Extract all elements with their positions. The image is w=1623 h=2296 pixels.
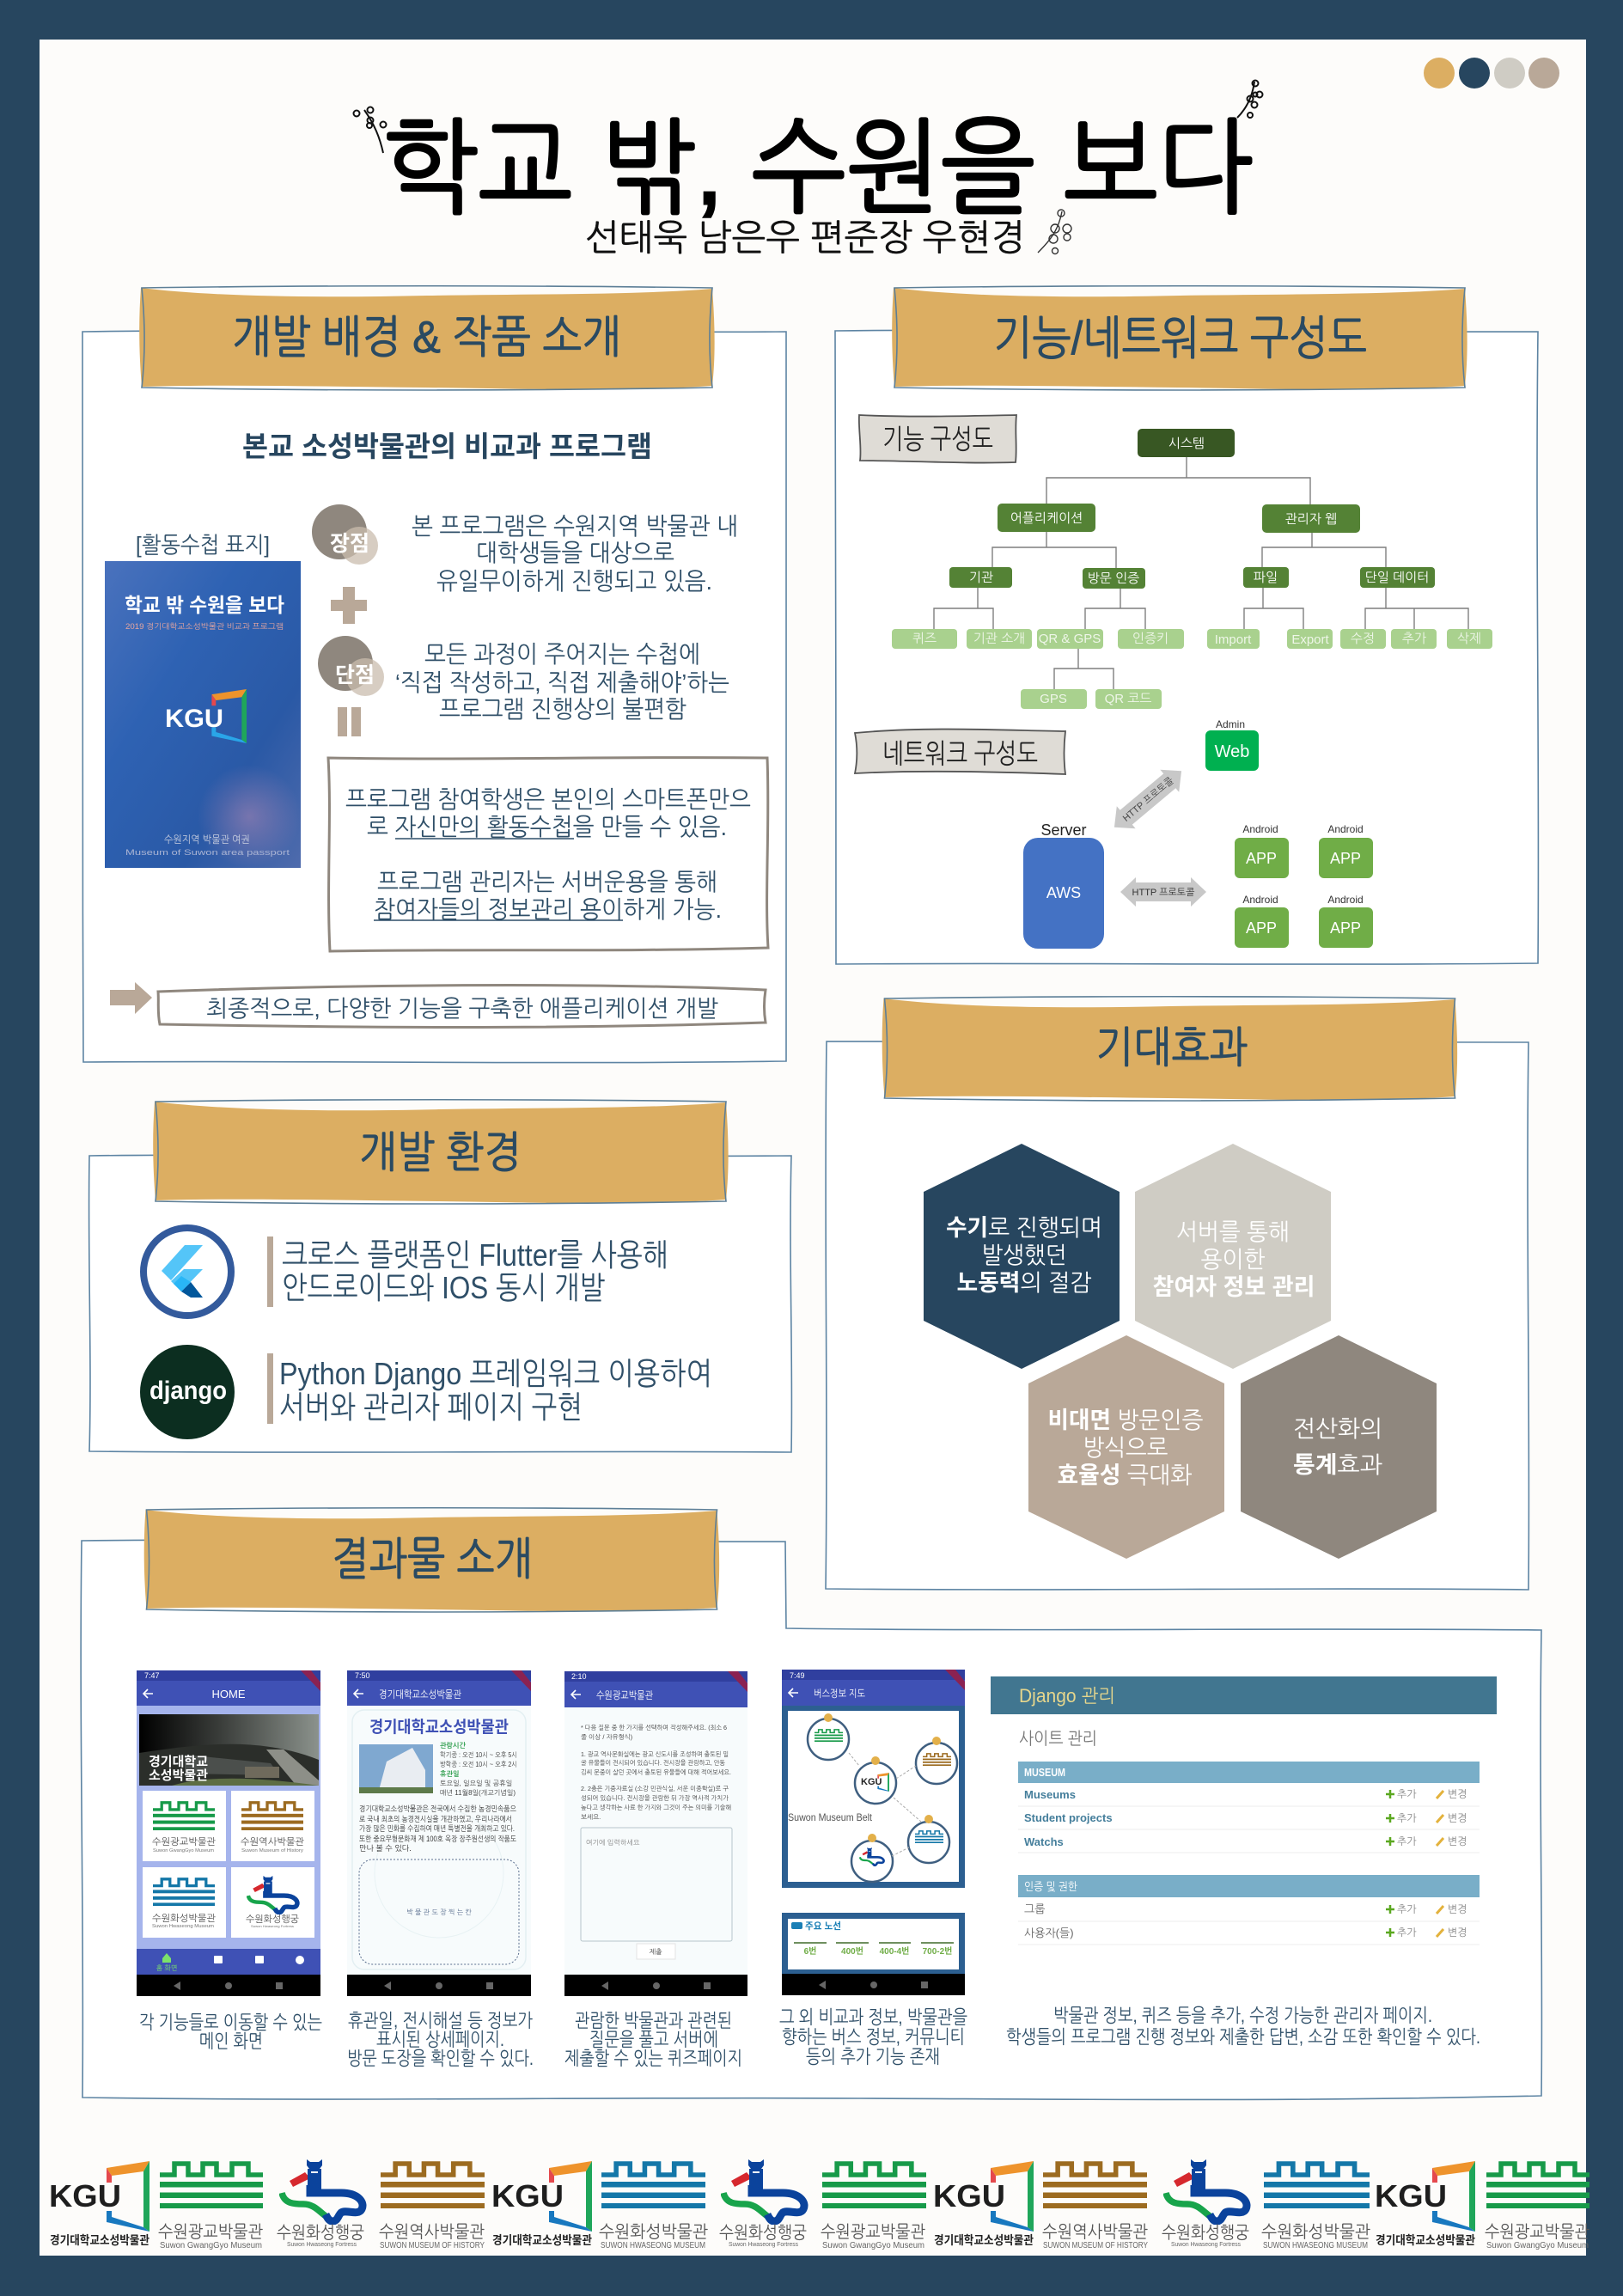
accent bar [267,1353,273,1424]
logo: KGU 2 [491,2161,592,2247]
palette dots [1424,58,1559,89]
panel: 개발 환경 [89,1100,791,1452]
logo: Hwaseong museum 2: SUWON HWASEONG MUSEUM [1263,2241,1368,2250]
banner [139,286,715,390]
screenshot: django admin: 변경 [1448,1903,1467,1915]
screenshot: detail page: 매년 11월8일(개교기념일) [440,1789,516,1797]
screenshot: django admin: Django 관리 [1019,1685,1115,1707]
screenshot: bus routes: 6번 [804,1946,816,1957]
logo: Hwaseong fortress 2: Suwon Hwaseong Fortress [729,2242,798,2248]
tag: 기능 구성도 [859,415,1016,463]
logo: Hwaseong fortress 1: 수원화성행궁 [277,2224,364,2243]
screenshot: bus map: Suwon Museum Belt [788,1811,873,1823]
screenshot: django admin: 추가 [1397,1835,1417,1847]
subtitle: team names: 선태욱 남은우 편준장 우현경 [585,217,1025,258]
network: android apps: APP [1246,919,1277,937]
hexagon: statistics: 통계효과 [1293,1452,1382,1478]
screenshot: django admin: 그룹 [1024,1902,1045,1915]
screenshot: quiz page: 보세요. [581,1813,601,1821]
screenshot: django admin: 변경 [1448,1788,1467,1800]
screenshot: bus routes: 400-4번 [880,1946,909,1957]
callout: solution box: 프로그램 참여학생은 본인의 스마트폰만으 [345,786,751,813]
screenshot: quiz page: 높다고 생각하는 사료 한 가지와 그것이 주는 의미를 기술해 [581,1804,731,1811]
icon: left blossom branch [354,107,387,153]
caption: detail page: 표시된 상세페이지. [376,2029,504,2050]
screenshot: bus map: KGU [861,1777,882,1787]
caption: quiz page: 제출할 수 있는 퀴즈페이지 [564,2048,742,2069]
banner [153,1100,729,1204]
heading: 개발 환경 [359,1128,522,1176]
logo: Hwaseong fortress 2 [719,2159,807,2248]
hexagon: labor saving: 노동력의 절감 [957,1270,1091,1296]
logo: GwangGyo 3 [1485,2164,1589,2250]
panel outline [826,1041,1528,1590]
screenshot: django admin: Student projects [1024,1811,1113,1824]
screenshot: detail page: 7:50 [355,1671,370,1680]
caption: extras: 등의 추가 기능 존재 [806,2046,940,2067]
screenshot: detail page: 박 물 관 도 장 찍 는 칸 [406,1908,472,1916]
screenshot: quiz page [564,1671,747,1996]
screenshot: bus routes [782,1913,965,1995]
screenshot: home screen: 수원화성행궁 [246,1914,300,1925]
icon: django logo: django [149,1377,227,1405]
network: android apps: APP [1330,919,1361,937]
panel outline [82,331,787,1063]
screenshot: home screen: 수원역사박물관 [241,1836,305,1847]
screenshot: quiz page: 2:10 [571,1672,587,1681]
screenshot: detail page [347,1670,531,1996]
network: admin web [1205,718,1259,771]
logo: KGU 4: 경기대학교소성박물관 [1376,2233,1475,2247]
arrow [110,982,152,1014]
banner [882,997,1457,1101]
screenshot: bus routes: 700-2번 [923,1946,952,1957]
caption: django admin: 박물관 정보, 퀴즈 등을 추가, 수정 가능한 관리자 페이지. [1053,2005,1432,2026]
screenshot: home screen: Suwon Hwaseong Museum [152,1924,214,1929]
caption: detail page: 휴관일, 전시해설 등 정보가 [348,2010,533,2031]
network: android apps [1235,823,1373,948]
screenshot: django admin: 변경 [1448,1835,1467,1847]
flutter text: 안드로이드와 IOS 동시 개발 [282,1270,605,1305]
function tree nodes: 기관 소개 [973,632,1025,646]
hexagon: labor saving: 수기로 진행되며 [946,1215,1102,1241]
caption: django admin: 학생들의 프로그램 진행 정보와 제출한 답변, 소감 또한 확인할 수 있다. [1006,2026,1480,2048]
screenshot: home screen: 소성박물관 [149,1768,208,1783]
function tree nodes [892,429,1492,709]
badge: 단점 [318,636,384,696]
screenshot: quiz page: 여기에 입력하세요 [586,1839,640,1847]
passport cover image: KGU [165,705,223,733]
banner [144,1508,719,1612]
passport cover image: 학교 밖 수원을 보다 [125,594,284,616]
network: android apps: Android [1242,894,1278,906]
logo: history museum 1 [379,2164,485,2250]
logo: GwangGyo 1: Suwon GwangGyo Museum [160,2241,262,2250]
hexagon: contactless efficiency: 효율성 극대화 [1057,1462,1193,1488]
logo: KGU 2: KGU [491,2178,564,2214]
icon: flutter logo [143,1228,231,1316]
logo: KGU 2: 경기대학교소성박물관 [492,2233,592,2247]
function tree nodes: GPS [1040,692,1067,706]
screenshot: detail page: 경기대학교소성박물관 [369,1718,509,1737]
logo: GwangGyo 2: 수원광교박물관 [821,2223,925,2242]
screenshot: quiz page: 2. 2층은 기증자료실 (소강 민관식실, 서운 이종학실)로 구 [581,1785,729,1792]
screenshot: detail page: 토요일, 일요일 및 공휴일 [440,1780,512,1787]
screenshot: home screen: 수원화성박물관 [152,1913,217,1924]
screenshot: home screen: 홈 화면 [156,1964,177,1972]
callout: solution box: 로 자신만의 활동수첩을 만들 수 있음. [367,814,727,840]
screenshot: detail page: 학기중 : 오전 10시 ~ 오후 5시 [440,1751,517,1759]
hexagon: participant management: 용이한 [1201,1247,1265,1273]
screenshot: bus routes: 400번 [841,1946,863,1957]
django text [279,1356,712,1425]
screenshot: home screen: Suwon Museum of History [241,1848,304,1853]
caption: extras: 그 외 비교과 정보, 박물관을 [779,2006,967,2028]
network: AWS server: Server [1040,821,1087,839]
advantage text: 본 프로그램은 수원지역 박물관 내 [412,513,738,540]
function tree nodes: QR & GPS [1039,632,1101,646]
screenshot: quiz page: 수원광교박물관 [596,1689,653,1701]
panel: 결과물 소개 [81,1508,1541,2100]
caption: extras: 향하는 버스 정보, 커뮤니티 [782,2026,965,2048]
arrow: server to apps [1120,877,1206,907]
callout: solution box: 참여자들의 정보관리 용이하게 가능. [374,896,722,923]
logo: Hwaseong museum 1: SUWON HWASEONG MUSEUM [601,2241,705,2250]
logo: history museum 2: SUWON MUSEUM OF HISTORY [1043,2241,1148,2250]
hexagon: contactless efficiency: 비대면 방문인증 [1048,1408,1203,1433]
function tree nodes: 추가 [1402,632,1426,646]
screenshot: quiz page: 굴 유물들이 전시되어 있습니다. 전시장을 관람하고, 안동 [581,1759,725,1767]
network: android apps: APP [1246,850,1277,867]
screenshot: bus map: 7:49 [790,1671,805,1680]
title: 학교 밖, 수원을 보다 [383,111,1253,226]
screenshot: django admin: 추가 [1397,1812,1417,1824]
screenshot: bus map [782,1670,965,1888]
conclusion box [158,985,766,1028]
screenshot: django admin: 사용자(들) [1024,1927,1074,1939]
logo: history museum 2: 수원역사박물관 [1042,2223,1148,2242]
logo: GwangGyo 3: 수원광교박물관 [1485,2223,1589,2242]
network: android apps: Android [1327,894,1364,906]
logo: Hwaseong museum 1: 수원화성박물관 [599,2223,708,2242]
caption: quiz page: 관람한 박물관과 관련된 [575,2010,732,2031]
screenshot: quiz page: * 다음 질문 중 한 가지를 선택하여 작성해주세요. (최소 6 [581,1724,727,1731]
advantage text [412,513,738,595]
icon: django logo [140,1345,235,1439]
network: android apps: APP [1330,850,1361,867]
logo: KGU 4: KGU [1375,2178,1447,2214]
screenshot: django admin: 추가 [1397,1788,1417,1800]
logo: history museum 1: 수원역사박물관 [379,2223,485,2242]
screenshot: django admin: 변경 [1448,1812,1467,1824]
logo: Hwaseong fortress 3: Suwon Hwaseong Fortress [1171,2242,1241,2248]
badge: 장점 [312,504,378,565]
logo: KGU 1: 경기대학교소성박물관 [50,2233,149,2247]
logo: KGU 3: KGU [933,2178,1005,2214]
logo: GwangGyo 2 [821,2164,926,2250]
caption: quiz page [564,2010,742,2069]
icon: small blossom branch [1038,210,1071,254]
logo: Hwaseong fortress 3 [1162,2159,1249,2248]
panel outline [89,1155,791,1452]
panel outline [835,330,1538,964]
screenshot: home screen [137,1670,320,1996]
accent bar [267,1237,273,1307]
hexagon: statistics [1241,1335,1437,1559]
hexagon: participant management [1135,1144,1331,1369]
screenshot: detail page: 가장 많은 민화를 수집하여 매년 특별전을 개최하고 있다. [359,1824,515,1833]
function tree nodes: 삭제 [1457,632,1481,646]
function tree nodes: 파일 [1254,571,1278,585]
function tree nodes: 관리자 웹 [1285,512,1337,527]
screenshot: home screen: 경기대학교 [149,1755,208,1769]
screenshot: quiz page: 제출 [649,1948,662,1956]
cover caption: [활동수첩 표지] [136,532,270,558]
function tree nodes: Export [1291,632,1330,647]
function tree nodes: 어플리케이션 [1010,511,1083,526]
network: admin web: Admin [1216,718,1245,730]
screenshot: detail page: 휴관일 [440,1770,460,1778]
screenshot: bus routes: 주요 노선 [805,1920,841,1932]
flutter text: 크로스 플랫폼인 Flutter를 사용해 [282,1237,668,1273]
logo: Hwaseong fortress 1 [277,2159,364,2248]
heading: 기능/네트워크 구성도 [993,313,1367,364]
caption: detail page: 방문 도장을 확인할 수 있다. [347,2048,534,2069]
logo: Hwaseong museum 2 [1261,2164,1370,2250]
django text: 서버와 관리자 페이지 구현 [279,1389,583,1425]
screenshot: quiz page: 1. 광교 역사문화실에는 광교 신도시를 조성하며 출토된 밀 [581,1750,729,1758]
logo: Hwaseong fortress 1: Suwon Hwaseong Fortress [287,2242,357,2248]
badge: 단점: 단점 [335,663,375,687]
footer logo strip [49,2159,1589,2250]
panel: 기대효과 [826,997,1528,1590]
network: android apps: Android [1327,823,1364,835]
flutter text [282,1237,668,1305]
network: AWS server: AWS [1046,884,1081,901]
logo: Hwaseong fortress 2: 수원화성행궁 [719,2224,807,2243]
caption: detail page [347,2010,534,2069]
screenshot: django admin: 추가 [1397,1903,1417,1915]
function tree connectors [934,457,1468,689]
passport cover image: 수원지역 박물관 여권 [164,834,250,846]
django text: Python Django 프레임워크 이용하여 [279,1356,712,1391]
screenshot: home screen: Suwon Hwaseong Fortress [251,1924,294,1928]
network: android apps: Android [1242,823,1278,835]
arrow: server to apps: HTTP 프로토콜 [1132,887,1195,898]
logo: GwangGyo 2: Suwon GwangGyo Museum [822,2241,924,2250]
caption: home screen: 각 기능들로 이동할 수 있는 [139,2012,322,2033]
disadvantage text: 프로그램 진행상의 불편함 [439,696,686,723]
hexagon: contactless efficiency: 방식으로 [1083,1435,1168,1461]
caption: extras [779,2006,967,2067]
hexagon: contactless efficiency [1028,1335,1224,1559]
logo: KGU 3 [933,2161,1034,2247]
disadvantage text: 모든 과정이 주어지는 수첩에 [424,641,700,668]
tag: 네트워크 구성도: 네트워크 구성도 [882,738,1038,769]
screenshot: home screen: 7:47 [144,1671,160,1680]
caption: home screen [139,2012,322,2052]
badge: 장점: 장점 [330,532,369,556]
arrow: server to web: HTTP 프로토콜 [1120,775,1176,824]
disadvantage text [395,641,729,723]
caption: django admin [1006,2005,1480,2048]
panel: 기능/네트워크 구성도 [835,286,1538,964]
function tree nodes: 퀴즈 [912,632,937,646]
tag: 기능 구성도: 기능 구성도 [882,424,993,455]
heading: 기대효과 [1095,1023,1248,1072]
screenshot: home screen: 수원광교박물관 [152,1836,217,1847]
disadvantage text: ‘직접 작성하고, 직접 제출해야’하는 [395,669,729,696]
network: AWS server [1023,821,1104,949]
function tree nodes: 시스템 [1168,437,1205,451]
logo: GwangGyo 1: 수원광교박물관 [158,2223,263,2242]
screenshot: detail page: 관람시간 [440,1742,467,1749]
logo: KGU 3: 경기대학교소성박물관 [934,2233,1034,2247]
heading: 개발 배경 & 작품 소개 [232,313,621,363]
hexagon: participant management: 서버를 통해 [1176,1219,1290,1245]
arrow: server to web [1105,760,1191,839]
screenshot: quiz page: 줄 이상 / 자유형식) [581,1733,633,1741]
conclusion box: 최종적으로, 다양한 기능을 구축한 애플리케이션 개발 [206,996,718,1022]
panel: 개발 배경 & 작품 소개 [82,286,787,1063]
icon: equals bars [338,707,361,736]
screenshot: django admin: Watchs [1024,1835,1064,1848]
callout: solution box: 프로그램 관리자는 서버운용을 통해 [377,869,717,895]
function tree nodes: 수정 [1351,632,1375,646]
screenshot: bus map: 버스정보 지도 [814,1688,865,1700]
hexagon: participant management: 참여자 정보 관리 [1153,1274,1315,1300]
panel outline [81,1540,1541,2100]
advantage text: 대학생들을 대상으로 [476,540,674,566]
screenshot: django admin: 변경 [1448,1927,1467,1939]
caption: quiz page: 질문을 풀고 서버에 [589,2029,718,2050]
hexagon: labor saving [924,1144,1120,1369]
hexagon: statistics: 전산화의 [1293,1416,1382,1442]
logo: history museum 2 [1042,2164,1148,2250]
function tree nodes: Import [1215,632,1252,647]
screenshot: home screen: Suwon GwangGyo Museum [153,1848,214,1853]
passport cover image: Museum of Suwon area passport [125,848,290,857]
icon: right blossom branch [1237,81,1263,118]
logo: Hwaseong museum 1 [599,2164,708,2250]
screenshot: detail page: 만나 볼 수 있다. [359,1844,412,1853]
function tree nodes: 방문 인증 [1088,571,1139,586]
logo: Hwaseong museum 2: 수원화성박물관 [1261,2223,1370,2242]
screenshot: django admin: 추가 [1397,1927,1417,1939]
advantage text: 유일무이하게 진행되고 있음. [436,568,712,595]
banner [892,286,1467,390]
screenshot: django admin: Museums [1024,1788,1076,1801]
screenshot: detail page: 경기대학교소성박물관은 전국에서 수집한 농경민속품으 [359,1804,516,1813]
logo: KGU 1 [49,2161,149,2247]
logo: history museum 1: SUWON MUSEUM OF HISTORY [380,2241,485,2250]
function tree nodes: 인증키 [1132,632,1168,646]
icon: plus [331,587,367,624]
network: admin web: Web [1215,742,1249,761]
hexagon: labor saving: 발생했던 [981,1243,1067,1268]
callout: solution box [328,758,768,951]
screenshot: detail page: 또한 중요무형문화재 제 100호 옥장 장주원선생의 작품도 [359,1835,516,1843]
caption: home screen: 메인 화면 [199,2030,263,2052]
function tree nodes: 단일 데이터 [1365,571,1429,585]
screenshot: django admin: MUSEUM [1024,1766,1065,1779]
screenshot: quiz page: 성되어 있습니다. 전시장을 관람한 뒤 가장 역사적 가치가 [581,1794,729,1802]
logo: Hwaseong fortress 3: 수원화성행궁 [1162,2224,1249,2243]
screenshot: quiz page: 김씨 문중이 살던 곳에서 출토된 유물들에 대해 적어보세요. [581,1768,731,1776]
screenshot: django admin [991,1676,1497,1945]
tag: 네트워크 구성도 [855,730,1065,774]
function tree nodes: QR 코드 [1105,692,1151,706]
screenshot: home screen: HOME [211,1688,246,1701]
heading: 결과물 소개 [332,1535,533,1585]
screenshot: detail page: 경기대학교소성박물관 [379,1688,461,1701]
logo: GwangGyo 3: Suwon GwangGyo Museum [1486,2241,1589,2250]
function tree nodes: 기관 [969,571,994,585]
screenshot: django admin: 사이트 관리 [1019,1730,1097,1749]
passport cover image: 2019 경기대학교소성박물관 비교과 프로그램 [125,622,284,631]
screenshot: django admin: 인증 및 권한 [1024,1880,1077,1893]
logo: KGU 4 [1375,2161,1475,2247]
logo: GwangGyo 1 [158,2164,263,2250]
subheading: 본교 소성박물관의 비교과 프로그램 [242,430,652,462]
screenshot: detail page: 로 국내 최초의 농경전시실을 개관하였고, 우리나라에서 [359,1815,512,1823]
screenshot: detail page: 방학중 : 오전 10시 ~ 오후 2시 [440,1761,517,1768]
logo: KGU 1: KGU [49,2178,121,2214]
passport cover image [105,561,301,868]
